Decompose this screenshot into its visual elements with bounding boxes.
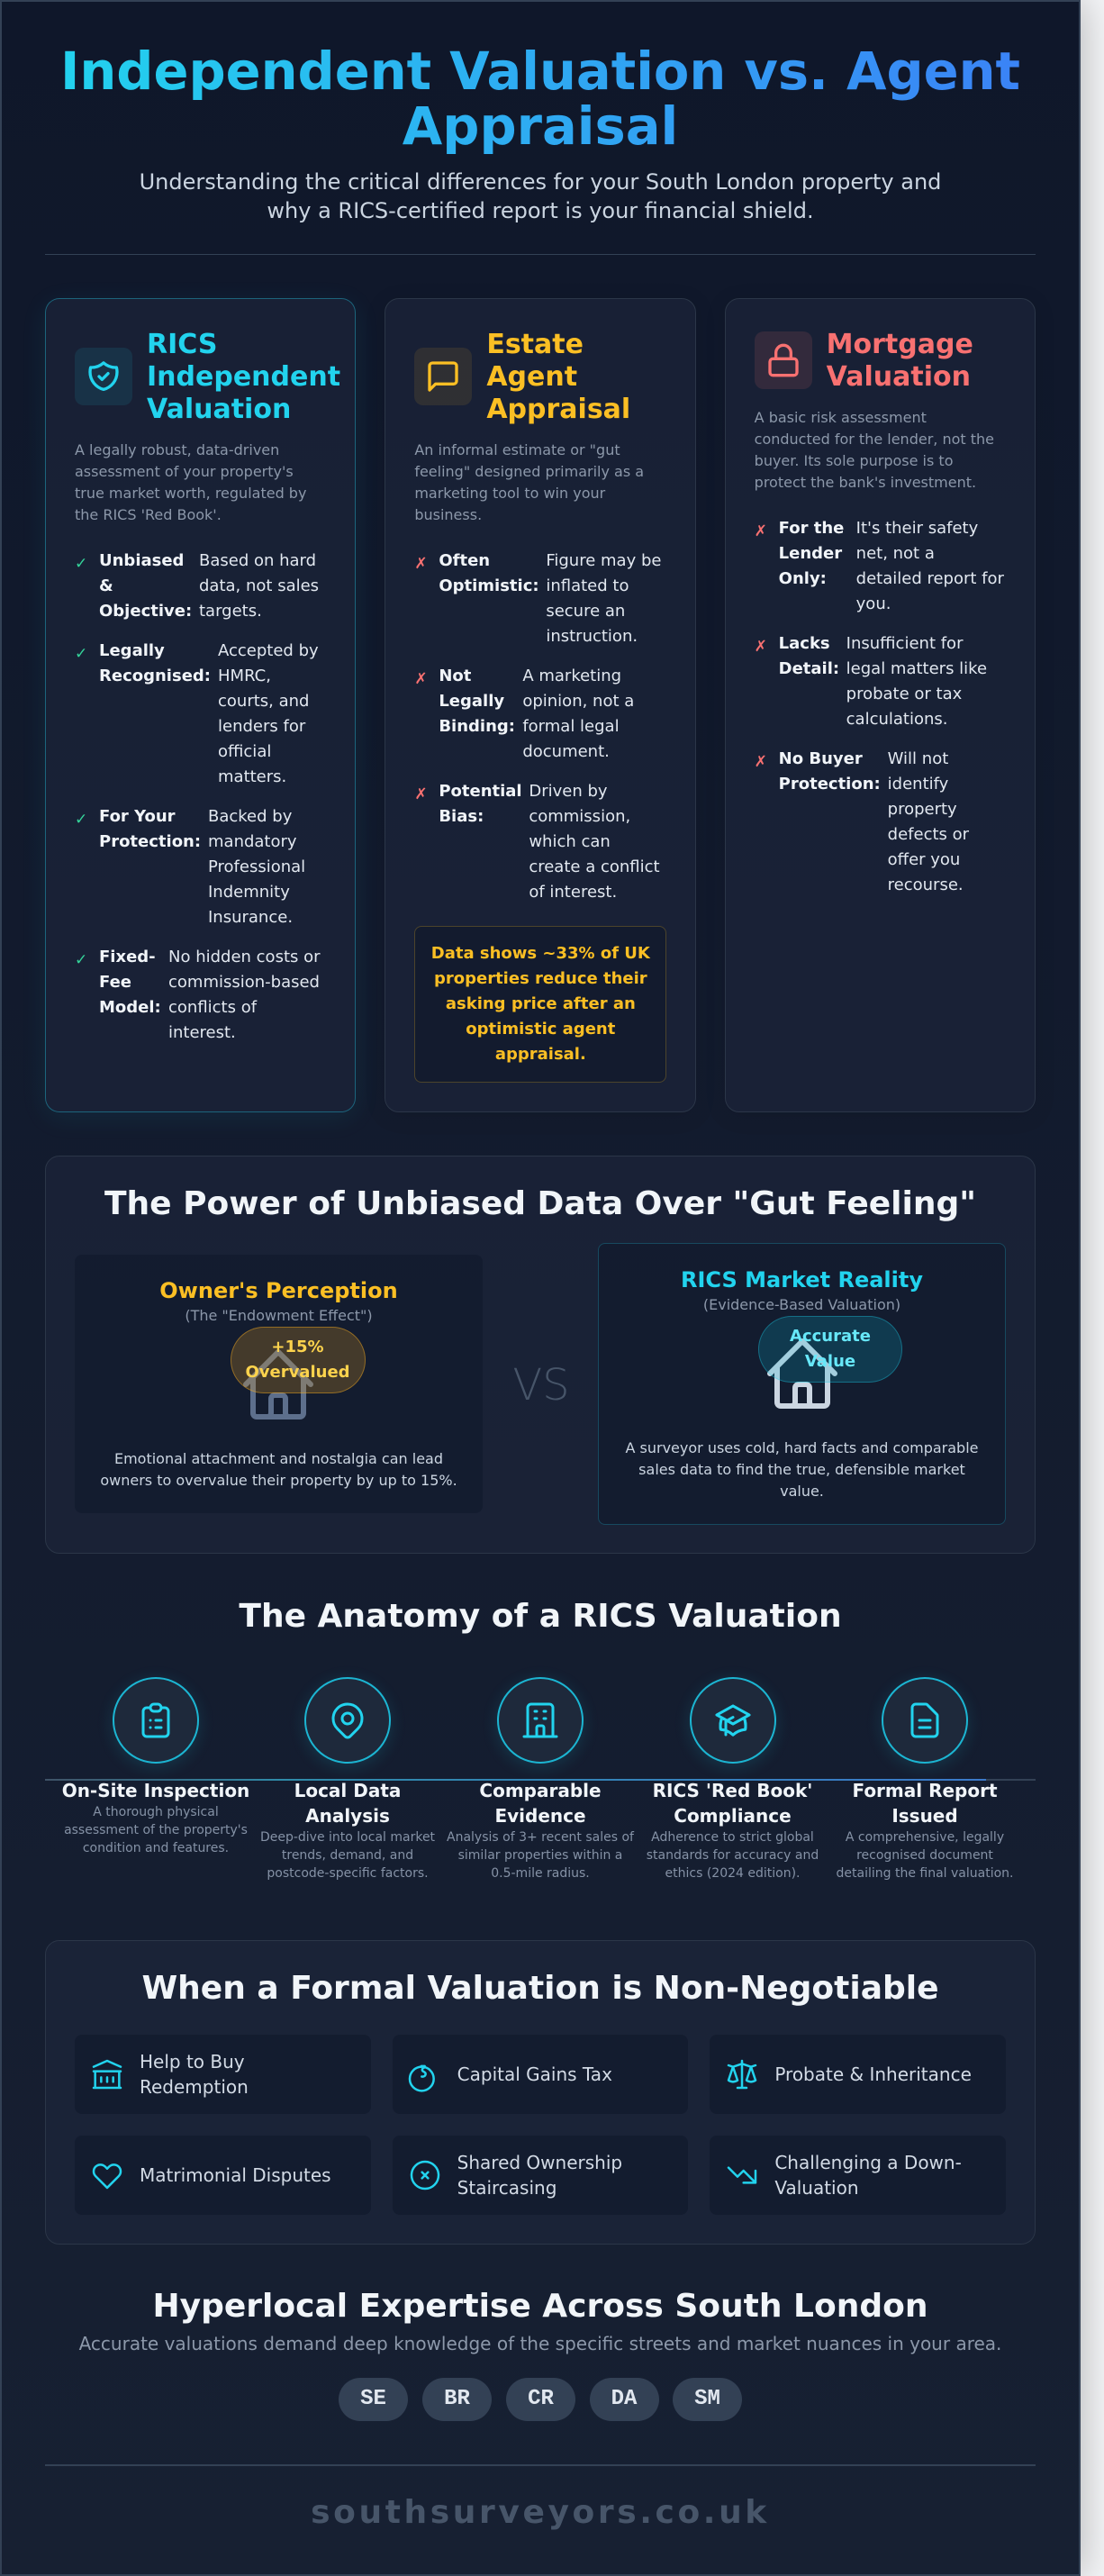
point: unbiased: Objective: — [99, 602, 192, 621]
point: lacks detail: Detail: — [779, 659, 839, 678]
point: not legally binding: Binding: — [439, 717, 515, 736]
RICS market reality box — [598, 1243, 1006, 1525]
card title: Mortgage — [827, 329, 973, 360]
point: for the lender only: ✗ — [755, 522, 767, 540]
title: Independent Valuation vs. Agent — [60, 41, 1020, 102]
item: matrimonial — [75, 2136, 371, 2215]
callout: 33 percent stat: optimistic agent — [466, 1020, 615, 1039]
section heading: The Power of Unbiased Data Over "Gut Feeling" — [104, 1185, 976, 1222]
point: for the lender only: net, not a — [856, 544, 935, 563]
step text: A thorough physical — [93, 1805, 219, 1819]
point: not legally binding: opinion, not a — [522, 692, 634, 711]
point: lacks detail: Insufficient for — [846, 634, 963, 653]
point: legally recognised: Recognised: — [99, 667, 211, 685]
panel: Estate Agent Appraisal — [385, 298, 696, 1112]
icon: heart — [89, 2157, 125, 2193]
point: unbiased: targets. — [199, 602, 262, 621]
point: no buyer protection: property — [888, 800, 957, 819]
point: fixed fee: commission-based — [168, 973, 320, 992]
chip SE — [339, 2378, 408, 2421]
card title: Independent — [147, 361, 340, 393]
title — [45, 44, 1036, 154]
panel: when a formal valuation is non-negotiable — [45, 1940, 1036, 2245]
icon: x circle — [407, 2157, 443, 2193]
step title: Compliance — [674, 1805, 792, 1827]
step text: assessment of the property's — [64, 1823, 248, 1837]
point: often optimistic: ✗ — [414, 555, 428, 573]
step title: Comparable — [479, 1780, 602, 1801]
point: for your protection — [75, 807, 305, 927]
timeline line — [45, 1779, 1036, 1781]
description: conducted for the lender, not the — [755, 431, 994, 448]
box caption: sales data to find the true, defensible market — [638, 1461, 965, 1478]
step text: detailing the final valuation. — [837, 1866, 1013, 1881]
chip DA: DA — [611, 2387, 637, 2411]
chip CR — [506, 2378, 575, 2421]
description: protect the bank's investment. — [755, 474, 976, 491]
description: true market worth, regulated by — [75, 485, 306, 502]
step text — [837, 1830, 1013, 1881]
item label: Challenging a Down- — [774, 2152, 962, 2173]
step: comparable evidence — [447, 1677, 634, 1881]
item label — [140, 2051, 249, 2098]
point: fixed fee: ✓ — [75, 951, 87, 969]
point: for the lender only — [755, 519, 1004, 613]
item label — [457, 2150, 622, 2200]
point: lacks detail: legal matters like — [846, 659, 987, 678]
callout: 33 percent stat — [414, 926, 666, 1083]
item label: Shared Ownership — [457, 2152, 622, 2173]
step title: Analysis — [305, 1805, 390, 1827]
item: shared ownership — [393, 2136, 688, 2215]
point: fixed fee: interest. — [168, 1023, 236, 1042]
step text: trends, demand, and — [282, 1848, 413, 1863]
point: no buyer protection: ✗ — [755, 753, 767, 771]
description: A basic risk assessment — [755, 409, 927, 426]
point: unbiased: Based on hard — [199, 551, 316, 570]
icon: location pin — [304, 1677, 391, 1764]
point: lacks detail: ✗ — [755, 638, 767, 656]
description — [755, 409, 994, 491]
point: legally recognised: HMRC, — [218, 667, 271, 685]
subtitle: why a RICS-certified report is your financial shield. — [267, 198, 814, 223]
point: for your protection: ✓ — [75, 811, 87, 829]
point: unbiased: data, not sales — [199, 576, 319, 595]
description: the RICS 'Red Book'. — [75, 506, 222, 523]
point: potential bias: Driven by — [529, 782, 608, 801]
step text — [647, 1830, 819, 1881]
item label: Probate & Inheritance — [774, 2064, 972, 2085]
description: feeling" designed primarily as a — [414, 463, 644, 480]
card title — [147, 329, 340, 425]
point: legally recognised: ✓ — [75, 645, 87, 663]
point: no buyer protection — [755, 749, 969, 894]
description: marketing tool to win your — [414, 485, 605, 502]
point: fixed fee — [75, 948, 321, 1042]
point: for your protection: Indemnity — [208, 883, 290, 902]
point: fixed fee: Fixed- — [99, 948, 156, 966]
panel: RICS Independent Valuation — [45, 298, 356, 1112]
point: legally recognised — [75, 641, 319, 786]
step title: Evidence — [494, 1805, 586, 1827]
description: A legally robust, data-driven — [75, 441, 279, 458]
point: for the lender only: you. — [856, 594, 891, 613]
card title: RICS — [147, 329, 217, 360]
step title — [294, 1780, 401, 1827]
box caption — [100, 1450, 457, 1489]
section: hyperlocal expertise — [45, 2286, 1036, 2421]
point: not legally binding: Not — [439, 667, 471, 685]
point: for your protection: For Your — [99, 807, 176, 826]
step text: condition and features. — [83, 1841, 229, 1855]
point: potential bias: create a conflict — [529, 857, 660, 876]
footer: website: southsurveyors.co.uk — [311, 2494, 770, 2531]
callout: 33 percent stat: Data shows ~33% of UK — [431, 944, 650, 963]
point: for your protection: Backed by — [208, 807, 292, 826]
icon: shield check — [75, 348, 132, 405]
section heading: Hyperlocal Expertise Across South London — [153, 2288, 928, 2325]
point: for the lender only: For the — [779, 519, 844, 538]
item label: Valuation — [774, 2177, 859, 2199]
point: legally recognised: official — [218, 742, 271, 761]
VS label: VS — [512, 1360, 570, 1410]
icon: academic cap — [690, 1677, 776, 1764]
item: capital gains tax — [393, 2035, 688, 2114]
step text: Deep-dive into local market — [260, 1830, 435, 1845]
chip SM: SM — [694, 2387, 720, 2411]
title: Appraisal — [403, 96, 678, 157]
description: business. — [414, 506, 482, 523]
point: lacks detail: calculations. — [846, 710, 947, 729]
chip DA — [589, 2378, 659, 2421]
point: often optimistic: Figure may be — [546, 551, 661, 570]
step text: Adherence to strict global — [651, 1830, 814, 1845]
point: fixed fee: Model: — [99, 998, 161, 1017]
item label: Capital Gains Tax — [457, 2064, 612, 2085]
step title — [479, 1780, 602, 1827]
point: for the lender only: It's their safety — [856, 519, 978, 538]
chip SM — [673, 2378, 742, 2421]
box caption: owners to overvalue their property by up to 15%. — [100, 1472, 457, 1489]
item label: Matrimonial Disputes — [140, 2164, 331, 2186]
point: no buyer protection: Will not — [888, 749, 948, 768]
box heading: Owner's Perception — [159, 1278, 398, 1303]
point: not legally binding: document. — [522, 742, 610, 761]
icon: building — [497, 1677, 584, 1764]
icon: speech bubble — [414, 348, 472, 405]
step text: A comprehensive, legally — [846, 1830, 1004, 1845]
point: fixed fee: Fee — [99, 973, 131, 992]
point: often optimistic: inflated to — [546, 576, 629, 595]
box heading: RICS Market Reality — [681, 1267, 923, 1293]
point: not legally binding: ✗ — [414, 670, 428, 688]
step text: Analysis of 3+ recent sales of — [447, 1830, 634, 1845]
point: not legally binding: Legally — [439, 692, 504, 711]
item label: Redemption — [140, 2076, 249, 2098]
box subheading: (Evidence-Based Valuation) — [703, 1296, 900, 1313]
card title: Valuation — [147, 394, 291, 425]
point: no buyer protection: No Buyer — [779, 749, 863, 768]
point: no buyer protection: recourse. — [888, 875, 964, 894]
subtitle — [140, 169, 941, 223]
postcode chips — [339, 2378, 742, 2421]
step text: similar properties within a — [458, 1848, 622, 1863]
section heading: The Anatomy of a RICS Valuation — [239, 1598, 842, 1635]
point: no buyer protection: offer you — [888, 850, 960, 869]
item: down valuation — [710, 2136, 1006, 2215]
callout: 33 percent stat: appraisal. — [495, 1045, 586, 1064]
step text: standards for accuracy and — [647, 1848, 819, 1863]
point: often optimistic: Optimistic: — [439, 576, 539, 595]
card title: Agent — [486, 361, 577, 393]
step: red book compliance — [647, 1677, 819, 1881]
point: unbiased: Unbiased — [99, 551, 184, 570]
icon: bank — [92, 2059, 122, 2090]
point: potential bias: which can — [529, 832, 611, 851]
step title: Formal Report — [852, 1780, 998, 1801]
point: often optimistic: instruction. — [546, 627, 638, 646]
step text: 0.5-mile radius. — [491, 1866, 590, 1881]
section heading: When a Formal Valuation is Non-Negotiable — [141, 1970, 939, 2007]
icon: document — [882, 1677, 968, 1764]
item label — [774, 2150, 962, 2200]
step title — [653, 1780, 812, 1827]
box caption: value. — [780, 1483, 824, 1500]
step text: ethics (2024 edition). — [665, 1866, 800, 1881]
point: potential bias: commission, — [529, 807, 630, 826]
description — [414, 441, 644, 523]
step title — [852, 1780, 998, 1827]
step: local data analysis — [260, 1677, 435, 1881]
callout: 33 percent stat: asking price after an — [446, 994, 636, 1013]
box caption: A surveyor uses cold, hard facts and comparable — [625, 1439, 978, 1456]
icon: house bright — [767, 1338, 837, 1409]
point: no buyer protection: Protection: — [779, 775, 881, 794]
point: for the lender only: Lender — [779, 544, 842, 563]
point: for your protection: Insurance. — [208, 908, 293, 927]
item label: Staircasing — [457, 2177, 557, 2199]
owner's perception box — [75, 1255, 483, 1513]
point: legally recognised: Accepted by — [218, 641, 319, 660]
badge: overvalued — [231, 1327, 366, 1393]
point: no buyer protection: defects or — [888, 825, 969, 844]
point: potential bias: ✗ — [414, 785, 428, 803]
point: legally recognised: lenders for — [218, 717, 305, 736]
point: often optimistic: secure an — [546, 602, 625, 621]
description: An informal estimate or "gut — [414, 441, 620, 458]
item label: Help to Buy — [140, 2051, 245, 2073]
card title: Appraisal — [486, 394, 630, 425]
callout: 33 percent stat: properties reduce their — [434, 969, 647, 988]
point: potential bias: Potential — [439, 782, 522, 801]
step text — [64, 1805, 248, 1855]
chip SE: SE — [360, 2387, 386, 2411]
point: potential bias: of interest. — [529, 883, 617, 902]
icon: trending down — [724, 2157, 760, 2193]
point: not legally binding: A marketing — [522, 667, 621, 685]
panel: Mortgage Valuation — [725, 298, 1036, 1112]
subtitle: Understanding the critical differences for your South London property and — [140, 169, 941, 195]
point: unbiased: & — [99, 576, 113, 595]
point: not legally binding — [414, 667, 634, 761]
badge: overvalued: Overvalued — [245, 1363, 350, 1382]
point: for your protection: Professional — [208, 857, 305, 876]
step: formal report issued — [837, 1677, 1013, 1881]
chip CR: CR — [528, 2387, 554, 2411]
point: no buyer protection: identify — [888, 775, 948, 794]
point: legally recognised: matters. — [218, 767, 286, 786]
badge: accurate value: Accurate — [790, 1327, 871, 1346]
icon: gains circle — [409, 2064, 435, 2092]
step text — [447, 1830, 634, 1881]
point: fixed fee: conflicts of — [168, 998, 257, 1017]
box subheading: (The "Endowment Effect") — [185, 1307, 373, 1324]
point: for your protection: Protection: — [99, 832, 201, 851]
badge: accurate value — [758, 1316, 902, 1383]
point: potential bias: Bias: — [439, 807, 484, 826]
badge: accurate value: Value — [805, 1352, 855, 1371]
card title — [827, 329, 973, 393]
card title: Valuation — [827, 361, 971, 393]
point: lacks detail: Lacks — [779, 634, 830, 653]
step title: RICS 'Red Book' — [653, 1780, 812, 1801]
chip BR — [422, 2378, 492, 2421]
point: lacks detail — [755, 634, 987, 729]
step title: Issued — [891, 1805, 958, 1827]
point: often optimistic — [414, 551, 661, 646]
point: unbiased: ✓ — [75, 555, 87, 573]
icon: scales — [724, 2056, 760, 2092]
step title: On-Site Inspection — [62, 1780, 249, 1801]
badge: overvalued: +15% — [271, 1338, 324, 1356]
point: unbiased — [75, 551, 319, 621]
item: probate — [710, 2035, 1006, 2114]
icon: house muted — [243, 1349, 313, 1420]
point: legally recognised: Legally — [99, 641, 165, 660]
card title: Estate — [486, 329, 584, 360]
step text: recognised document — [856, 1848, 993, 1863]
point: fixed fee: No hidden costs or — [168, 948, 321, 966]
icon: lock — [755, 331, 812, 389]
point: lacks detail: probate or tax — [846, 685, 962, 703]
description: assessment of your property's — [75, 463, 294, 480]
point: legally recognised: courts, and — [218, 692, 309, 711]
item: help to buy — [75, 2035, 371, 2114]
point: not legally binding: formal legal — [522, 717, 620, 736]
step title: Local Data — [294, 1780, 401, 1801]
panel: unbiased data comparison — [45, 1156, 1036, 1554]
step text — [260, 1830, 435, 1881]
point: for your protection: mandatory — [208, 832, 297, 851]
description — [75, 441, 306, 523]
card title — [486, 329, 630, 425]
point: for the lender only: Only: — [779, 569, 827, 588]
step: on-site inspection — [62, 1677, 249, 1855]
header: title and subtitle — [60, 41, 1020, 223]
description: buyer. Its sole purpose is to — [755, 452, 953, 469]
step text: postcode-specific factors. — [267, 1866, 429, 1881]
box caption — [625, 1439, 978, 1500]
point: potential bias — [414, 782, 660, 902]
box caption: Emotional attachment and nostalgia can lead — [114, 1450, 443, 1467]
icon: clipboard — [113, 1677, 199, 1764]
point: often optimistic: Often — [439, 551, 490, 570]
section text: Accurate valuations demand deep knowledge of the specific streets and market nuances in your area. — [79, 2333, 1001, 2354]
chip BR: BR — [444, 2387, 470, 2411]
point: for the lender only: detailed report for — [856, 569, 1004, 588]
